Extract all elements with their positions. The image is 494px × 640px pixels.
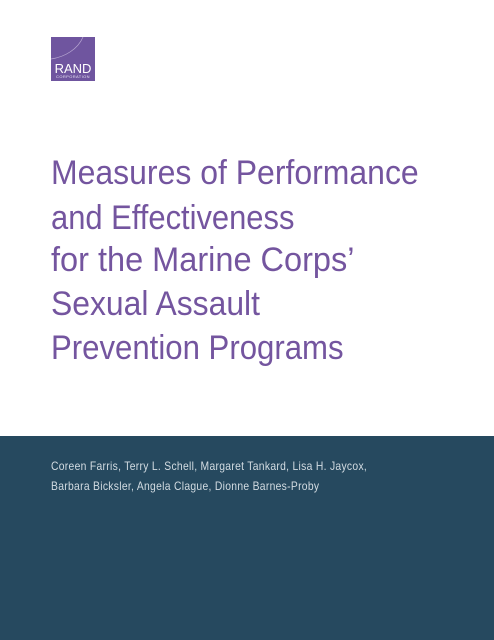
title: for the Marine Corps’	[51, 241, 355, 279]
authors panel: Barbara Bicksler, Angela Clague, Dionne Barnes-Proby	[51, 479, 319, 493]
title: Prevention Programs	[51, 329, 344, 367]
logo: RAND Corporation	[51, 37, 95, 81]
authors panel: Coreen Farris, Terry L. Schell, Margaret Tankard, Lisa H. Jaycox,	[51, 459, 367, 473]
logo: RAND Corporation: RAND	[55, 60, 91, 76]
logo: RAND Corporation: CORPORATION	[56, 74, 90, 79]
title	[51, 154, 419, 367]
authors panel	[0, 436, 494, 640]
title: Measures of Performance	[51, 154, 419, 192]
title: Sexual Assault	[51, 285, 260, 323]
title: and Effectiveness	[51, 199, 294, 237]
